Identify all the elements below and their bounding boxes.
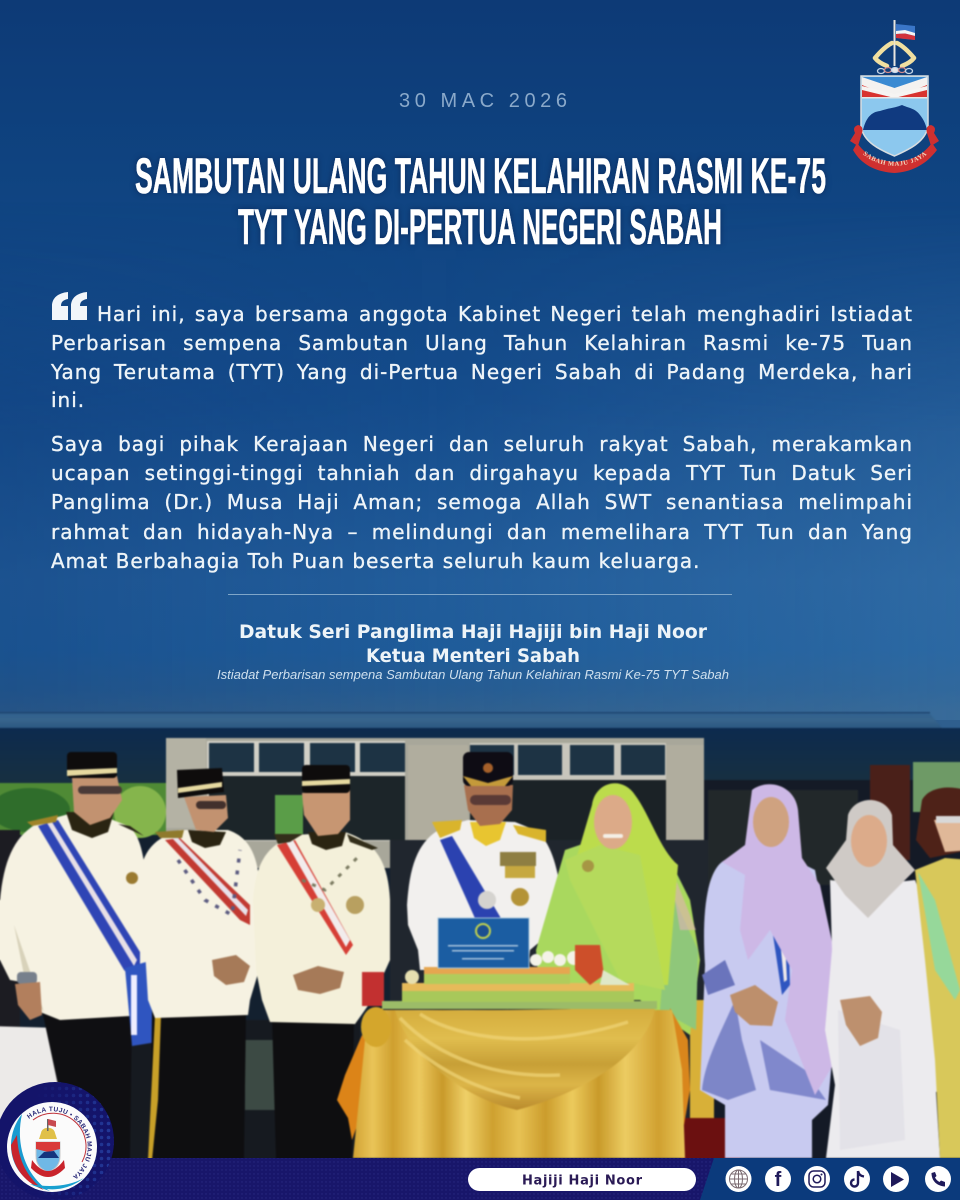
icon: globe (726, 1166, 752, 1192)
arms (875, 43, 914, 66)
name pill (468, 1168, 696, 1191)
icon: facebook: f (775, 1169, 782, 1191)
name pill: Hajiji Haji Noor (522, 1174, 643, 1188)
motto scroll (850, 125, 939, 173)
icon: opening quotation mark (52, 292, 87, 320)
paragraph two: Saya bagi pihak Kerajaan Negeri dan seluruh rakyat Sabah, merakamkan (51, 432, 913, 456)
logo badge: Hala Tuju (0, 1082, 114, 1200)
cake table with gold cloth (337, 945, 690, 1158)
lady in white (825, 800, 950, 1158)
paragraph two: rahmat dan hidayah-Nya – melindungi dan memelihara TYT Tun dan Yang (51, 520, 913, 544)
divider (228, 594, 732, 595)
lady in green (536, 783, 700, 1035)
man 1 (0, 752, 157, 1160)
social icons (726, 1166, 951, 1192)
lady in lilac (700, 784, 838, 1158)
paragraph one: Perbarisan sempena Sambutan Ulang Tahun Kelahiran Rasmi ke-75 Tuan (51, 331, 913, 355)
Tun, guest of honour (407, 752, 562, 970)
motto scroll: SABAH MAJU JAYA (863, 152, 927, 166)
quote text (50, 302, 913, 573)
photo background: building and crowd (0, 712, 960, 1164)
man 2 (139, 768, 262, 1160)
paragraph one: ini. (51, 388, 85, 412)
signature: Datuk Seri Panglima Haji Hajiji bin Haji Noor (239, 621, 708, 643)
paragraph two: Panglima (Dr.) Musa Haji Aman; semoga Allah SWT senantiasa melimpahi (51, 490, 913, 514)
paragraph two (50, 432, 913, 573)
shield (861, 76, 928, 156)
logo badge: Hala Tuju: HALA TUJU • SABAH MAJU JAYA (26, 1106, 92, 1179)
lady at far right (915, 787, 960, 1158)
photo caption: Istiadat Perbarisan sempena Sambutan Ulang Tahun Kelahiran Rasmi Ke-75 TYT Sabah (217, 668, 729, 682)
Sabah state crest (850, 20, 939, 173)
icon: tiktok (844, 1166, 870, 1192)
title (135, 148, 826, 255)
paragraph one: Hari ini, saya bersama anggota Kabinet Negeri telah menghadiri Istiadat (97, 302, 913, 326)
paragraph one: Yang Terutama (TYT) Yang di-Pertua Negeri Sabah di Padang Merdeka, hari (51, 360, 913, 384)
signature: Ketua Menteri Sabah (366, 645, 580, 667)
paragraph two: Amat Berbahagia Toh Puan beserta seluruh kaum keluarga. (51, 549, 701, 573)
man 3 (253, 765, 390, 1160)
plaque on cake (438, 918, 529, 968)
signature (239, 621, 708, 667)
icon: facebook (765, 1166, 791, 1192)
white box at lower left (0, 1026, 82, 1120)
paragraph two: ucapan setinggi-tinggi tahniah dan dirgahayu kepada TYT Tun Datuk Seri (51, 461, 913, 485)
date: 30 MAC 2026 (399, 90, 567, 112)
flag and pole (894, 20, 915, 66)
paragraph one (50, 302, 913, 412)
icon: phone (925, 1166, 951, 1192)
beads (878, 68, 912, 74)
icon: instagram (804, 1166, 830, 1192)
icon: play (883, 1166, 909, 1192)
